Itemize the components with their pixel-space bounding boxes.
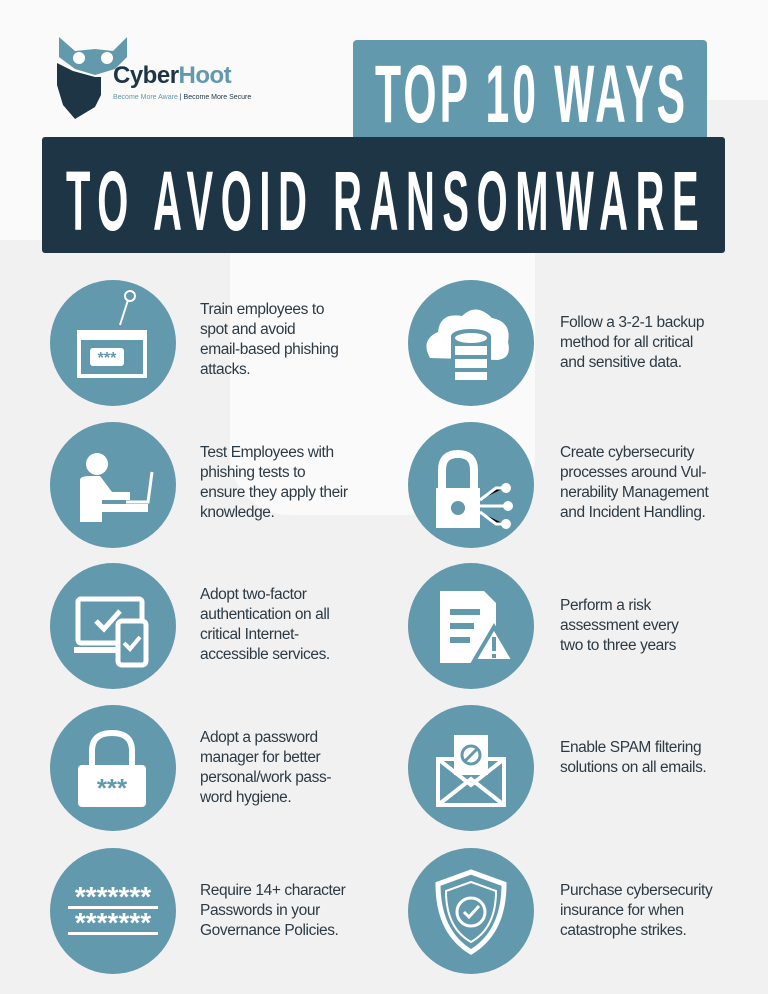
item 1 icon: phishing: *** <box>98 350 117 367</box>
item 5 icon: devices check <box>50 563 176 689</box>
title: to avoid ransomware: TO AVOID RANSOMWARE <box>66 154 706 248</box>
item 8 text: Enable SPAM filtering solutions on all emails. <box>560 739 706 776</box>
item 4 icon: lock circuit <box>408 422 534 548</box>
item 7 icon: password lock: *** <box>97 773 128 803</box>
logo <box>57 37 251 119</box>
item 7 icon: password lock <box>50 705 176 831</box>
item 1 icon: phishing <box>50 280 176 406</box>
item 10 icon: shield <box>408 848 534 974</box>
background shapes <box>0 0 768 240</box>
item 4 text: Create cybersecurity processes around Vul-nerability Management and Incident Handling. <box>560 444 708 521</box>
item 9 text: Require 14+ character Passwords in your Governance Policies. <box>200 882 345 939</box>
item 8 icon: spam envelope <box>408 705 534 831</box>
item 9 icon: asterisks: ******* <box>75 907 151 938</box>
item 3 icon: person at laptop <box>50 422 176 548</box>
item 9 icon: asterisks: ******* <box>75 881 151 912</box>
item 3 text: Test Employees with phishing tests to ensure they apply their knowledge. <box>200 444 348 521</box>
item 6 icon: document warning <box>408 563 534 689</box>
logo: Become More Aware | Become More Secure <box>113 94 251 101</box>
item 2 icon: backup <box>408 280 534 406</box>
logo: CyberHoot <box>113 62 231 89</box>
title: top 10 ways: TOP 10 WAYS <box>375 49 688 140</box>
item 5 text: Adopt two-factor authentication on all critical Internet-accessible services. <box>200 586 330 663</box>
item 1 text: Train employees to spot and avoid email-based phishing attacks. <box>200 301 338 378</box>
item 2 text: Follow a 3-2-1 backup method for all critical and sensitive data. <box>560 314 704 371</box>
item 6 text: Perform a risk assessment every two to three years <box>560 597 679 654</box>
item 10 text: Purchase cybersecurity insurance for when catastrophe strikes. <box>560 882 712 939</box>
item 9 icon: asterisks <box>50 848 176 974</box>
item 7 text: Adopt a password manager for better personal/work pass-word hygiene. <box>200 729 331 806</box>
